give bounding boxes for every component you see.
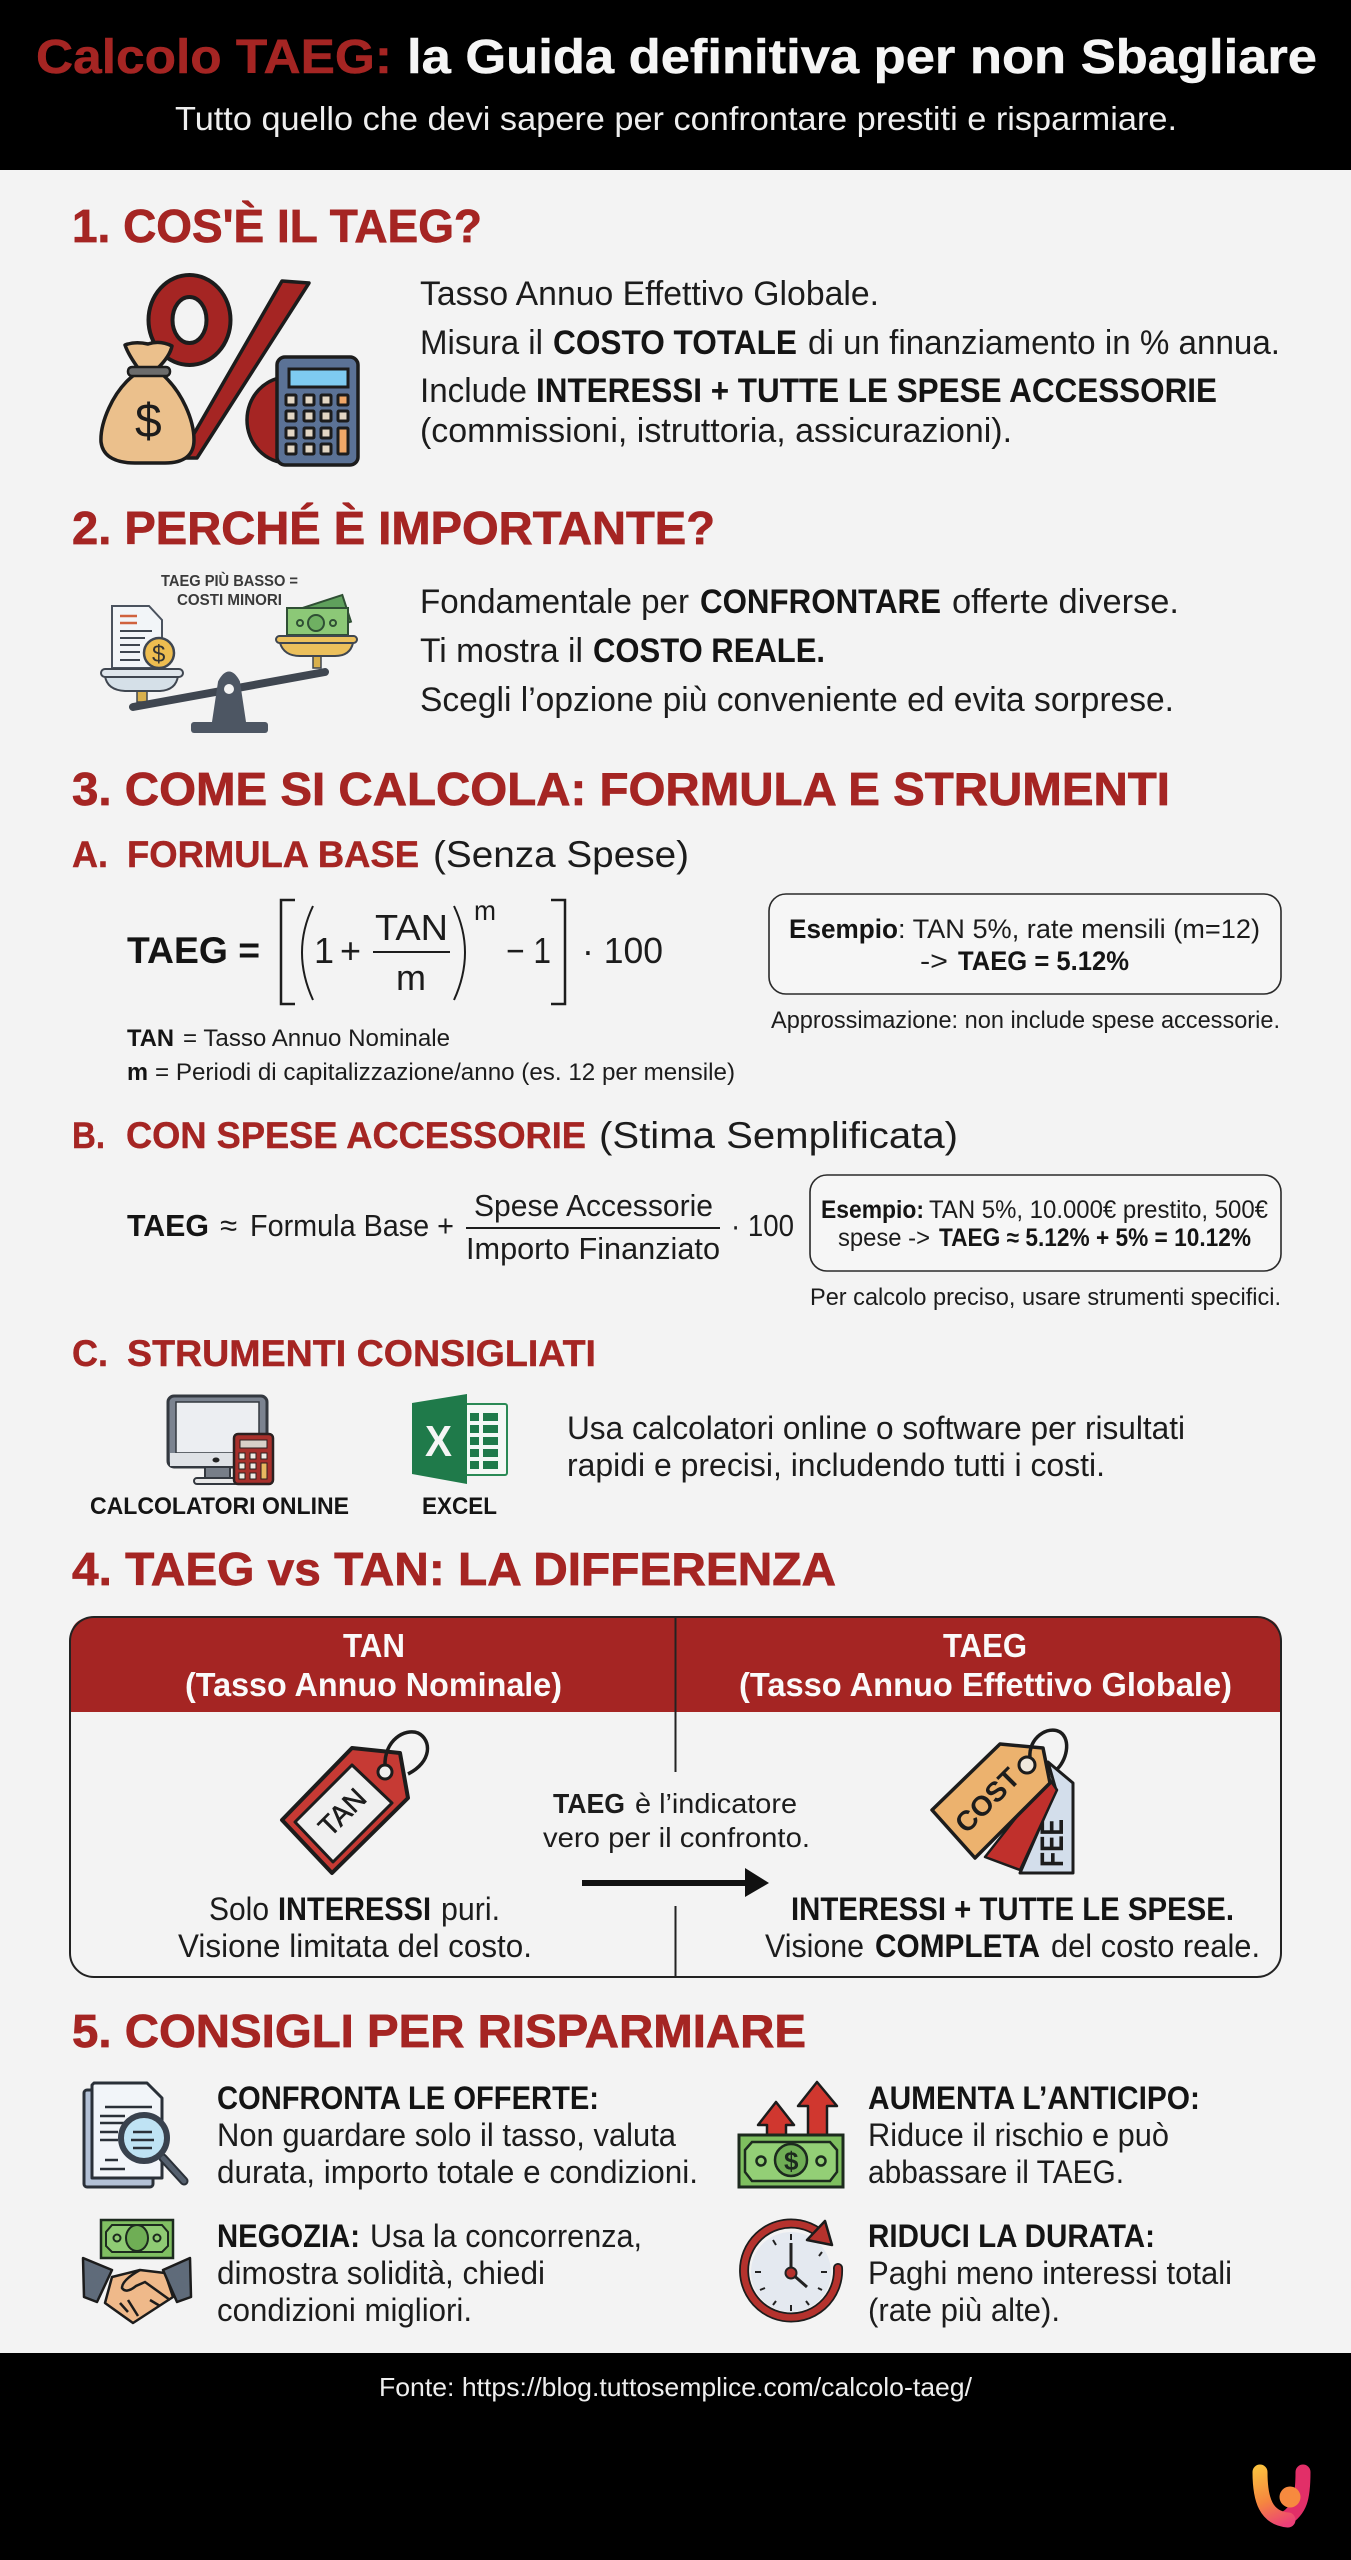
text block: definition: di un finanziamento in % annua.	[808, 324, 1280, 362]
icon: balance scale: TAEG PIÙ BASSO =	[161, 571, 298, 590]
text block: importance: Scegli l’opzione più conveniente ed evita sorprese.	[420, 681, 1174, 719]
column header: TAN: TAN	[343, 1627, 405, 1664]
callout: example A: Esempio	[789, 914, 898, 944]
text block: importance: COSTO REALE.	[593, 632, 825, 670]
panel: header	[0, 0, 1351, 170]
text block: tools	[567, 1410, 1185, 1483]
icon: percent with money bag and calculator	[101, 275, 358, 465]
text: TAEG is the true indicator: è l’indicatore	[635, 1788, 797, 1819]
legend: formula variables: m	[127, 1059, 148, 1086]
text block: definition: INTERESSI + TUTTE LE SPESE ACCESSORIE	[536, 372, 1217, 410]
text: reduce duration	[868, 2218, 1232, 2328]
subtitle: Tutto quello che devi sapere per confrontare prestiti e risparmiare.	[175, 100, 1177, 137]
icon: money with rising arrows	[739, 2082, 843, 2187]
formula: with fees: · 100	[731, 1208, 794, 1243]
heading: section 3: 3. COME SI CALCOLA: FORMULA E STRUMENTI	[72, 763, 1170, 815]
callout: example A: TAEG = 5.12%	[958, 946, 1129, 976]
text block: importance: Ti mostra il	[420, 632, 583, 670]
icon: cost and fee tags: FEE	[1034, 1819, 1070, 1867]
formula: base TAEG: m	[474, 895, 496, 926]
formula: base TAEG: · 100	[582, 930, 663, 971]
panel: section 3	[72, 763, 1281, 1520]
text: TAEG complete view: COMPLETA	[875, 1928, 1040, 1964]
callout: example B	[810, 1175, 1281, 1271]
text: TAEG is the true indicator	[543, 1788, 810, 1853]
text: TAEG complete view: INTERESSI + TUTTE LE SPESE.	[791, 1891, 1234, 1927]
column header: TAEG: (Tasso Annuo Effettivo Globale)	[739, 1666, 1232, 1703]
text: TAEG complete view: Visione	[765, 1928, 864, 1964]
subheading: A formula base: A.	[72, 834, 108, 875]
subheading: A formula base: FORMULA BASE	[127, 834, 419, 875]
callout: example B: Esempio:	[821, 1196, 924, 1224]
icon: handshake with money	[83, 2220, 191, 2323]
callout: example A	[769, 894, 1281, 994]
text: reduce duration: (rate più alte).	[868, 2292, 1060, 2328]
formula: base TAEG: 1	[314, 930, 334, 971]
heading: section 1: 1. COS'È IL TAEG?	[72, 200, 482, 252]
tip: negotiate	[83, 2218, 642, 2328]
comparison table	[70, 1617, 1281, 1977]
panel: section 1	[72, 200, 1280, 465]
text block: definition: (commissioni, istruttoria, assicurazioni).	[420, 412, 1012, 450]
legend: formula variables: = Periodi di capitalizzazione/anno (es. 12 per mensile)	[155, 1059, 735, 1086]
note: precise calculation: Per calcolo preciso, usare strumenti specifici.	[810, 1284, 1281, 1311]
formula: with fees: Spese Accessorie	[474, 1188, 713, 1223]
text: TAN limited view: puri.	[441, 1891, 500, 1927]
icon: TAN tag: TAN	[312, 1782, 372, 1842]
text: reduce duration: Paghi meno interessi totali	[868, 2255, 1232, 2291]
formula: base TAEG: +	[340, 930, 361, 971]
text block: importance	[420, 583, 1179, 719]
text: TAEG is the true indicator: vero per il confronto.	[543, 1822, 810, 1853]
icon: balance scale: COSTI MINORI	[177, 592, 282, 609]
callout: example A: ->	[920, 946, 948, 976]
text block: definition	[420, 275, 1280, 450]
icon: online calculator monitor	[168, 1396, 273, 1484]
text: negotiate: condizioni migliori.	[217, 2292, 472, 2328]
icon: cost and fee tags	[932, 1730, 1073, 1873]
subheading: C strumenti consigliati: STRUMENTI CONSIGLIATI	[127, 1333, 596, 1374]
text block: definition: COSTO TOTALE	[553, 324, 797, 362]
callout: example B: TAEG ≈ 5.12% + 5% = 10.12%	[939, 1224, 1251, 1252]
text: TAEG complete view	[765, 1891, 1260, 1964]
formula: base TAEG: m	[396, 957, 426, 998]
text: TAN limited view: Visione limitata del costo.	[178, 1928, 532, 1964]
subheading: B con spese accessorie: (Stima Semplificata)	[599, 1115, 958, 1156]
tip: reduce duration	[744, 2218, 1232, 2328]
subheading: B con spese accessorie	[72, 1115, 958, 1156]
heading: section 5: 5. CONSIGLI PER RISPARMIARE	[72, 2005, 806, 2057]
text: negotiate: dimostra solidità, chiedi	[217, 2255, 545, 2291]
formula: with fees: ≈	[220, 1208, 237, 1243]
icon: logo	[1260, 2472, 1303, 2520]
icon: money with rising arrows: $	[784, 2146, 799, 2176]
title: la Guida definitiva per non Sbagliare	[407, 31, 1317, 84]
formula: base TAEG: − 1	[506, 930, 551, 971]
subheading: A formula base	[72, 834, 689, 875]
formula: with fees: Importo Finanziato	[466, 1231, 720, 1266]
formula: with fees: TAEG	[127, 1208, 209, 1243]
text: negotiate: Usa la concorrenza,	[370, 2218, 642, 2254]
icon: excel	[412, 1394, 507, 1484]
text block: definition: Tasso Annuo Effettivo Globale.	[420, 275, 879, 313]
text: TAEG is the true indicator: TAEG	[553, 1788, 625, 1819]
panel: section 5	[72, 2005, 1232, 2328]
text: increase down payment: Riduce il rischio e può	[868, 2117, 1169, 2153]
column header: TAEG: TAEG	[943, 1627, 1027, 1664]
text block: importance: offerte diverse.	[952, 583, 1179, 621]
text: TAN limited view: Solo	[209, 1891, 269, 1927]
icon: clock with arrow	[744, 2221, 838, 2318]
heading: section 4: 4. TAEG vs TAN: LA DIFFERENZA	[72, 1543, 836, 1595]
text block: importance: CONFRONTARE	[700, 583, 941, 621]
icon: balance scale: $	[152, 641, 165, 668]
subheading: A formula base: (Senza Spese)	[433, 834, 689, 875]
text: increase down payment: AUMENTA L’ANTICIPO:	[868, 2080, 1200, 2116]
text: compare offers: Non guardare solo il tasso, valuta	[217, 2117, 676, 2153]
legend: formula variables: TAN	[127, 1025, 174, 1052]
panel: section 2	[72, 502, 1179, 733]
arrow: TAN to TAEG	[582, 1868, 769, 1897]
column header: TAEG	[739, 1627, 1232, 1703]
label: calcolatori online: CALCOLATORI ONLINE	[90, 1493, 349, 1520]
tip: compare offers	[84, 2080, 698, 2190]
text: increase down payment: abbassare il TAEG.	[868, 2154, 1124, 2190]
panel: footer	[0, 2353, 1351, 2560]
text: TAEG complete view: del costo reale.	[1051, 1928, 1260, 1964]
formula: with fees	[127, 1188, 794, 1266]
icon: TAN tag	[282, 1732, 427, 1873]
formula: base TAEG: TAN	[375, 907, 448, 948]
text: TAN limited view: INTERESSI	[278, 1891, 431, 1927]
text: negotiate	[217, 2218, 642, 2328]
icon: balance scale	[101, 571, 357, 733]
legend: formula variables	[127, 1025, 735, 1086]
callout: example B: TAN 5%, 10.000€ prestito, 500€	[929, 1196, 1268, 1224]
tip: increase down payment	[739, 2080, 1200, 2190]
text: compare offers	[217, 2080, 698, 2190]
source line: Fonte: https://blog.tuttosemplice.com/calcolo-taeg/	[379, 2372, 973, 2402]
subheading: C strumenti consigliati: C.	[72, 1333, 108, 1374]
text block: importance: Fondamentale per	[420, 583, 689, 621]
callout: example B: spese ->	[838, 1224, 930, 1252]
formula: base TAEG: TAEG =	[127, 930, 260, 971]
text: increase down payment	[868, 2080, 1200, 2190]
text: compare offers: durata, importo totale e condizioni.	[217, 2154, 698, 2190]
formula: base TAEG	[127, 895, 663, 1004]
icon: excel: X	[425, 1417, 452, 1466]
column header: TAN	[185, 1627, 562, 1703]
panel: section 4	[70, 1543, 1281, 1977]
title: Calcolo TAEG:	[36, 31, 392, 84]
text block: definition: Misura il	[420, 324, 543, 362]
title	[36, 31, 1317, 84]
text: TAN limited view	[178, 1891, 532, 1964]
formula: with fees: Formula Base +	[250, 1208, 454, 1243]
text: reduce duration: RIDUCI LA DURATA:	[868, 2218, 1155, 2254]
text block: tools: Usa calcolatori online o software per risultati	[567, 1410, 1185, 1446]
icon: document with magnifier	[84, 2083, 184, 2187]
heading: section 2: 2. PERCHÉ È IMPORTANTE?	[72, 502, 715, 554]
callout: example A: : TAN 5%, rate mensili (m=12)	[898, 914, 1260, 944]
text: compare offers: CONFRONTA LE OFFERTE:	[217, 2080, 599, 2116]
text block: definition: Include	[420, 372, 527, 410]
column header: TAN: (Tasso Annuo Nominale)	[185, 1666, 562, 1703]
subheading: B con spese accessorie: B.	[72, 1115, 105, 1156]
text: negotiate: NEGOZIA:	[217, 2218, 360, 2254]
text block: tools: rapidi e precisi, includendo tutti i costi.	[567, 1447, 1105, 1483]
icon: percent with money bag and calculator: $	[135, 395, 162, 448]
icon: cost and fee tags: COST	[949, 1762, 1026, 1839]
subheading: B con spese accessorie: CON SPESE ACCESSORIE	[126, 1115, 586, 1156]
note: approximation: Approssimazione: non include spese accessorie.	[771, 1007, 1280, 1034]
label: excel: EXCEL	[422, 1493, 497, 1520]
legend: formula variables: = Tasso Annuo Nominale	[183, 1025, 450, 1052]
